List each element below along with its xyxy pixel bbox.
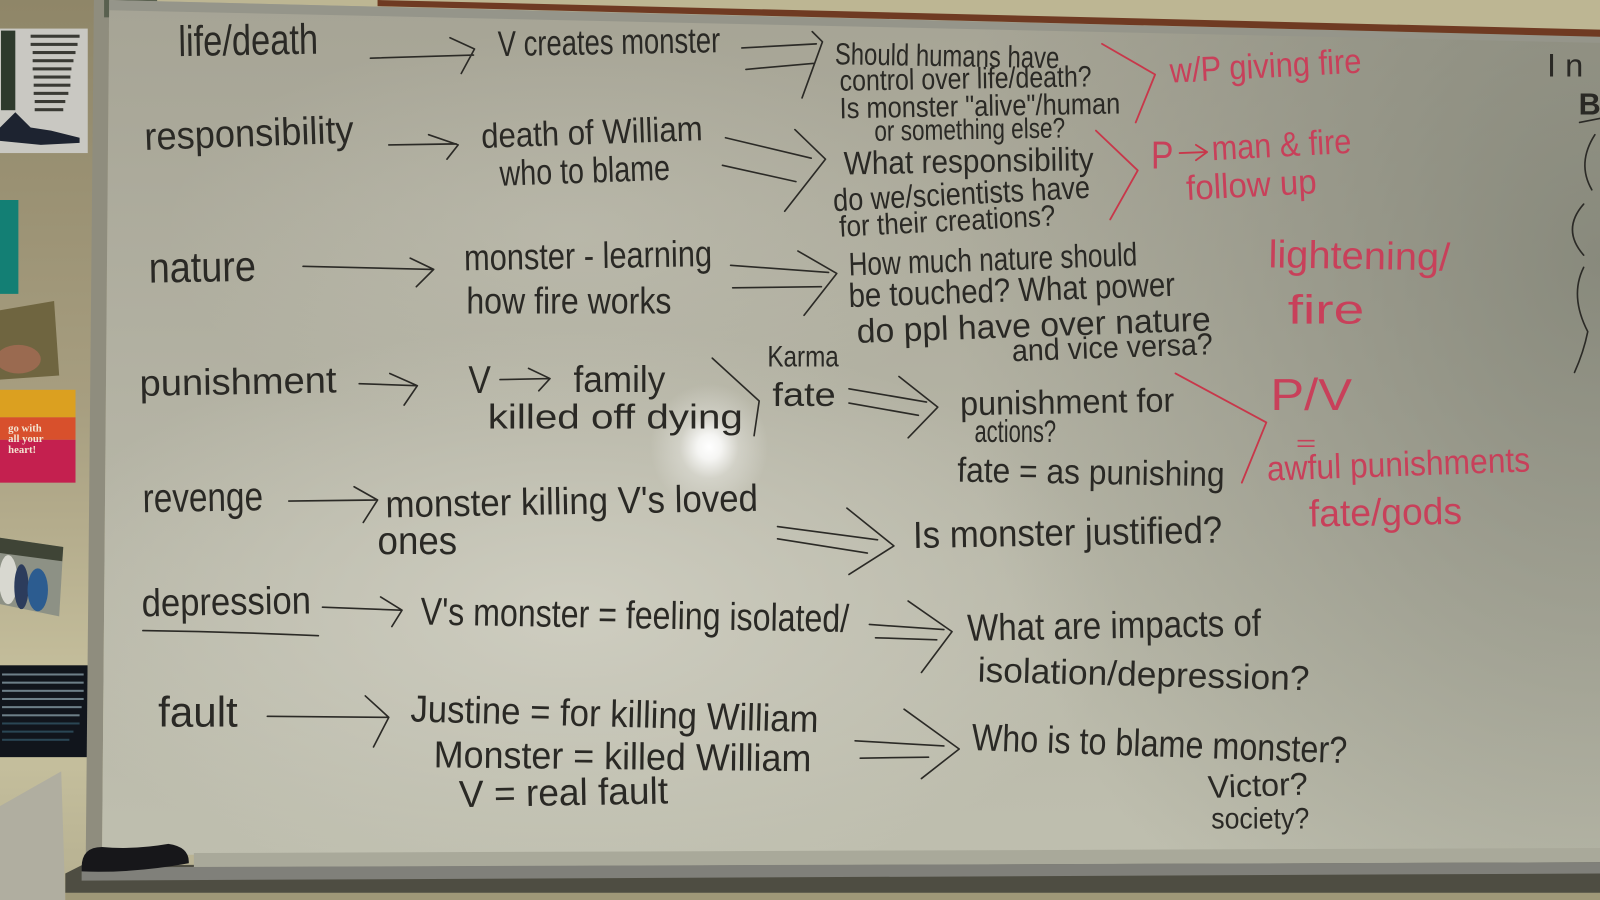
text: family: family: [573, 359, 666, 400]
question: punishment for: punishment for: [960, 383, 1175, 423]
text: V creates monster: V creates monster: [497, 20, 721, 64]
marker clip: [104, 0, 157, 17]
label: Karma: Karma: [767, 340, 839, 373]
text: who to blame: who to blame: [498, 148, 671, 194]
question: Is monster alive/human: Is monster "alive"/human: [839, 87, 1120, 125]
text: Monster killed William: Monster = killed William: [434, 733, 812, 779]
column 3: questions: [767, 37, 1348, 836]
double arrow: nature: [731, 251, 837, 315]
double arrow: responsibility: [722, 130, 826, 211]
question: isolation/depression: isolation/depression?: [977, 652, 1310, 698]
theme: nature: nature: [148, 243, 256, 293]
theme: revenge: revenge: [142, 473, 263, 521]
question: and vice versa: and vice versa?: [1011, 327, 1213, 368]
eraser: [82, 844, 189, 872]
question: How much nature should: How much nature should: [848, 235, 1138, 283]
theme: fault: fault: [158, 689, 238, 737]
cut-off note: I: I n: [1547, 47, 1583, 84]
question: society: society?: [1211, 803, 1309, 836]
double arrow: life/death: [742, 32, 822, 98]
arrow: P to man: [1180, 145, 1207, 160]
column 2: events: [378, 20, 850, 815]
upper wall strip: [102, 0, 1600, 31]
note: follow up: follow up: [1185, 163, 1318, 208]
question: for their creations: for their creations?: [838, 199, 1056, 244]
glare: [650, 384, 768, 510]
poster: go with all your heart: go with: [8, 423, 42, 435]
arrow: revenge: [289, 487, 378, 522]
question: fate as punishing: fate = as punishing: [957, 452, 1225, 494]
question: Who is to blame: Who is to blame monster?: [971, 716, 1348, 771]
question: Victor: Victor?: [1207, 765, 1308, 805]
red notes: [1151, 43, 1531, 535]
text: Justine: Justine = for killing William: [410, 687, 819, 740]
note: lightening: lightening/: [1268, 233, 1451, 280]
question: actions: actions?: [974, 413, 1056, 449]
question: impacts of: What are impacts of: [967, 602, 1262, 649]
arrow: nature: [303, 258, 434, 287]
question: do we/scientists have: do we/scientists have: [832, 169, 1091, 218]
question: What responsibility: What responsibility: [843, 140, 1095, 181]
right edge notes: [1547, 47, 1600, 121]
bracket: responsibility: [1096, 131, 1138, 219]
question: be touched: be touched? What power: [848, 267, 1176, 315]
note: P: P: [1151, 134, 1173, 177]
note: man and fire: man & fire: [1211, 123, 1352, 168]
poster: poem with mountain: [0, 29, 88, 153]
bracket: life/death: [1102, 44, 1155, 122]
poster: teal card: [0, 200, 18, 294]
text: V: V: [468, 359, 491, 402]
grey cabinet: [0, 771, 65, 900]
note: equals: =: [1296, 431, 1316, 456]
poster: dark text card: [0, 665, 88, 757]
arrow: depression: [322, 597, 402, 627]
text: V's monster feeling isolated: V's monster = feeling isolated/: [420, 590, 850, 641]
theme: punishment: punishment: [139, 359, 337, 404]
text: monster learning: monster - learning: [464, 233, 712, 278]
note: fate/gods: fate/gods: [1309, 490, 1462, 535]
text: V real fault: V = real fault: [459, 769, 669, 815]
right edge braces: [1572, 135, 1595, 372]
note: w/P giving fire: w/P giving fire: [1168, 43, 1362, 91]
top wood trim: [378, 0, 1600, 37]
poster: go with all your heart: [0, 390, 76, 483]
column 1: themes: [139, 16, 355, 737]
poster: go with all your heart: all your: [8, 433, 44, 445]
bracket: dying to fate: [712, 358, 759, 436]
bracket: punishment: [1176, 373, 1266, 483]
arrow: punishment: [359, 373, 417, 405]
whiteboard frame: [86, 0, 109, 862]
text: monster killing V's loved: monster killing V's loved: [385, 477, 758, 525]
photo: person on grass: [0, 301, 59, 380]
poster: go with all your heart: heart!: [8, 444, 36, 456]
theme: life/death: life/death: [178, 16, 319, 66]
arrow: life/death: [370, 38, 474, 73]
note: fire: fire: [1288, 286, 1364, 332]
question: Is monster justified: Is monster justified?: [913, 509, 1223, 556]
text: how fire works: how fire works: [466, 280, 671, 321]
double arrow: depression: [869, 601, 952, 672]
first arrows: [267, 38, 474, 747]
arrow: V to family: [500, 368, 550, 391]
chalk tray: [65, 848, 1600, 900]
photo: three women: [0, 538, 63, 616]
double arrow: revenge: [778, 508, 894, 574]
note: awful punishments: awful punishments: [1266, 441, 1531, 489]
text: killed off dying: killed off dying: [488, 399, 743, 437]
note: P/V: P/V: [1270, 369, 1352, 420]
question: do ppl have over nature: do ppl have over nature: [856, 302, 1211, 351]
double arrow: fate: [849, 377, 938, 438]
question: or something else: or something else?: [874, 112, 1065, 148]
text: death of William: death of William: [481, 110, 703, 156]
second arrows: [712, 32, 959, 779]
theme: depression: depression: [141, 579, 311, 625]
arrow: fault: [267, 696, 389, 747]
question: Should humans have: Should humans have: [835, 37, 1060, 75]
question: control over life/death: control over life/death?: [839, 60, 1092, 98]
double arrow: fault: [855, 709, 959, 779]
label: fate: fate: [772, 377, 836, 414]
theme: responsibility: responsibility: [144, 109, 355, 159]
red brackets: [1096, 44, 1266, 483]
arrow: responsibility: [389, 135, 458, 159]
text: ones: ones: [378, 520, 457, 563]
